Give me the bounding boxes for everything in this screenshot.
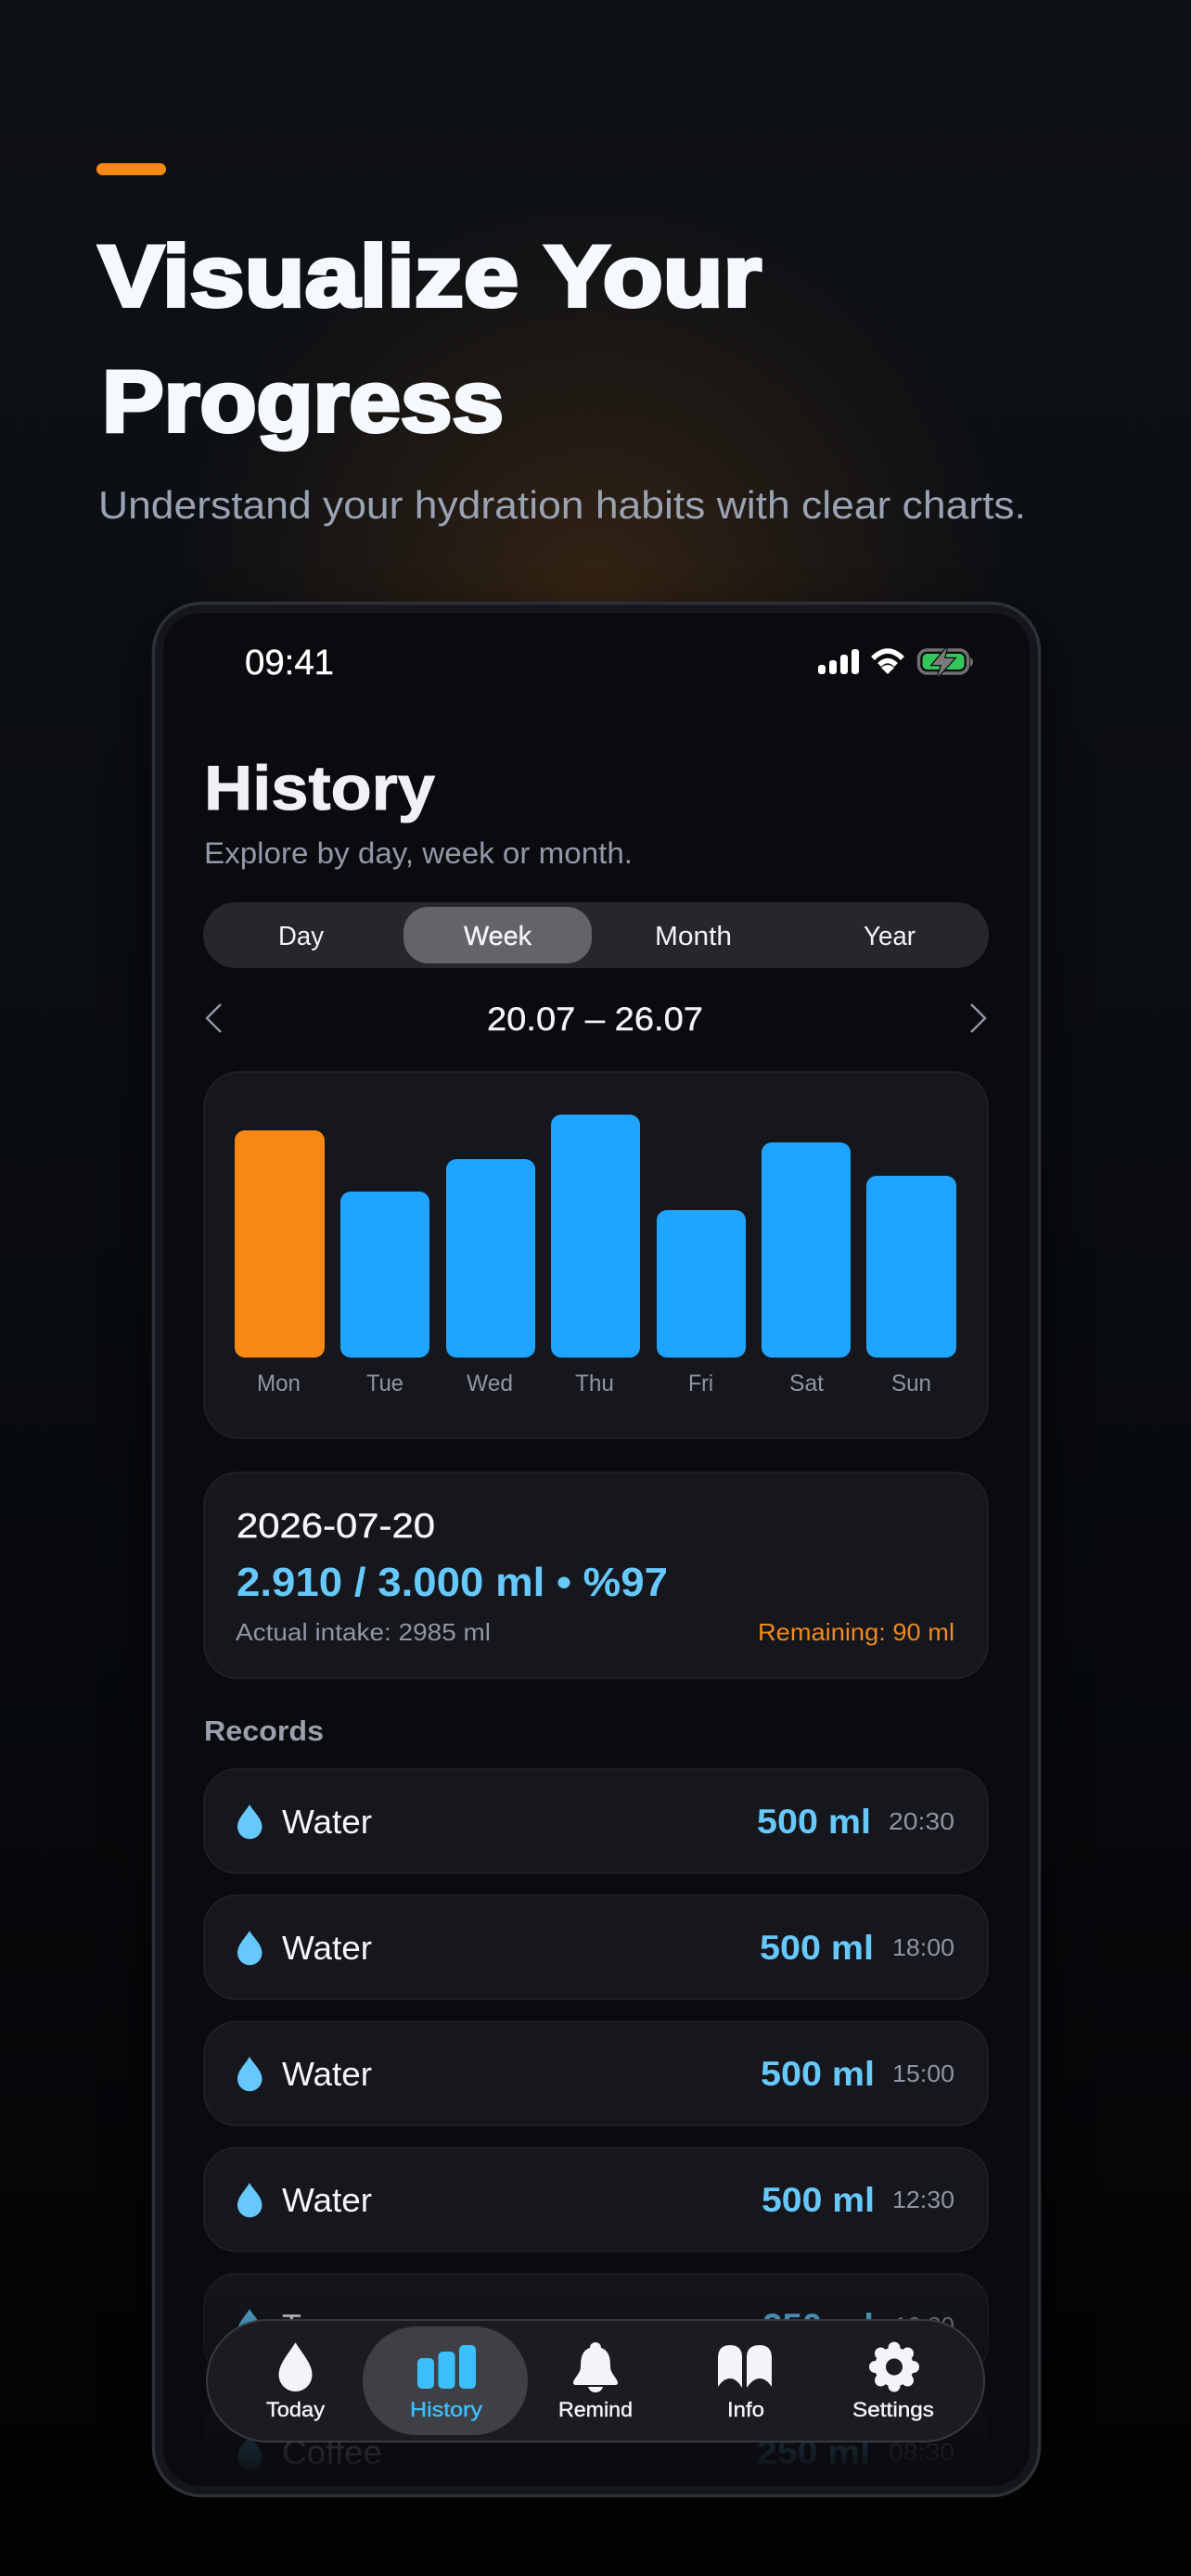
record: Water 18:00: 500 ml [760, 1929, 874, 1967]
nav item: History [410, 2345, 483, 2421]
nav item: Today: Today [266, 2398, 326, 2421]
actual intake: Actual intake: 2985 ml [236, 1618, 491, 1646]
summary total: 2.910 / 3.000 ml • %97 [237, 1560, 668, 1605]
nav item: Info [718, 2345, 772, 2421]
day labels: Wed [467, 1371, 513, 1396]
segmented control [203, 902, 989, 968]
phone mockup [139, 603, 1054, 2504]
segmented control: Day [278, 922, 324, 951]
record: Water 20:30 [204, 1769, 988, 1873]
record: Coffee [237, 2439, 954, 2469]
panel: weekly bar chart [204, 1072, 988, 1438]
nav item: Remind: Remind [558, 2398, 633, 2421]
subtitle: Understand your hydration habits with clear charts. [98, 483, 1026, 527]
date range: 20.07 – 26.07 [487, 1001, 703, 1038]
segmented control: Week [464, 922, 531, 951]
record: Coffee: 250 ml [757, 2433, 870, 2471]
nav item: History: History [410, 2398, 483, 2421]
icon: previous chevron [207, 1004, 221, 1032]
nav item: Remind [558, 2342, 633, 2421]
panel: day summary [204, 1473, 988, 1678]
record: Tea: 250 ml [762, 2307, 874, 2345]
bottom navigation bar [207, 2320, 984, 2442]
nav item: Settings [852, 2348, 934, 2421]
record: Water 18:00 [204, 1895, 988, 1999]
screen subtitle: Explore by day, week or month. [204, 836, 633, 870]
record: Water 20:30: 20:30 [889, 1807, 954, 1835]
phone shadow [139, 612, 1054, 2504]
record: Tea: 10:30 [894, 2312, 954, 2340]
record: Water 15:00: 500 ml [761, 2055, 875, 2093]
segmented control: Year [864, 922, 916, 951]
nav item: Info: Info [727, 2398, 764, 2421]
icon: wifi [873, 651, 903, 674]
record: Water 18:00: 18:00 [892, 1933, 954, 1961]
day labels: Sun [891, 1371, 931, 1396]
record: Water 18:00: Water [282, 1929, 372, 1967]
record: Coffee: Coffee [282, 2433, 382, 2471]
accent bar [96, 163, 166, 175]
selected nav item [363, 2327, 528, 2435]
record: Water 12:30: 12:30 [892, 2186, 954, 2213]
icon: signal [818, 649, 859, 674]
icon: next chevron [971, 1004, 985, 1032]
summary date: 2026-07-20 [237, 1507, 435, 1545]
remaining: Remaining: 90 ml [758, 1618, 954, 1646]
title: Progress [102, 352, 504, 450]
day labels: Thu [575, 1371, 614, 1396]
heading: Records: Records [204, 1715, 324, 1747]
status time: 09:41 [245, 644, 334, 682]
record: Water 15:00: Water [282, 2055, 372, 2093]
status bar [246, 647, 973, 677]
record: Water 20:30: 500 ml [757, 1803, 871, 1841]
record: Water 12:30 [204, 2148, 988, 2251]
nav item: Settings: Settings [852, 2398, 934, 2421]
list fade overlay [203, 2309, 989, 2486]
day labels: Sat [789, 1371, 824, 1396]
bars [235, 1115, 956, 1358]
record: Coffee: 08:30 [889, 2438, 954, 2466]
heading: History: History [204, 753, 435, 823]
record: Water 12:30: 500 ml [762, 2181, 875, 2219]
selected tab [403, 907, 592, 963]
day labels: Tue [366, 1371, 403, 1396]
record: Water 20:30: Water [282, 1803, 372, 1841]
day labels: Mon [257, 1371, 301, 1396]
record: Water 12:30: Water [282, 2181, 372, 2219]
day labels: Fri [688, 1371, 713, 1396]
date navigator [205, 1003, 987, 1033]
day labels [259, 1374, 929, 1391]
record: Water 15:00: 15:00 [892, 2060, 954, 2087]
phone screen [163, 613, 1030, 2504]
record: Tea: Tea [282, 2307, 334, 2345]
nav item: Today [266, 2343, 326, 2421]
phone frame [154, 603, 1039, 2496]
title [98, 227, 762, 450]
record: Tea [203, 2273, 989, 2363]
title: Visualize Your [98, 227, 762, 325]
segmented control: Month [655, 922, 732, 951]
record: Water 15:00 [204, 2021, 988, 2125]
icon: charging battery [918, 647, 973, 677]
